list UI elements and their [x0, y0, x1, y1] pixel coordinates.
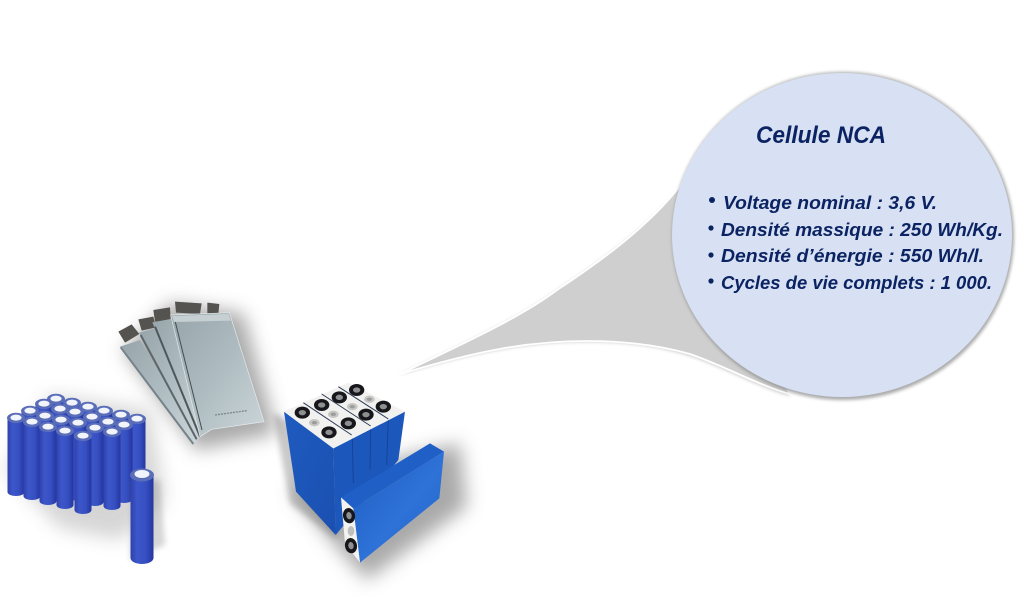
bullet list: specifications: Densité d’énergie : 550 Wh/l.	[721, 245, 984, 266]
prismatic cells	[273, 383, 467, 580]
bullet list: specifications: Voltage nominal : 3,6 V.	[723, 192, 937, 213]
callout circle	[672, 72, 1014, 400]
front cell	[341, 443, 444, 563]
pouch cells	[118, 302, 277, 450]
stack sides	[284, 412, 336, 535]
bullet list: specifications	[708, 192, 1003, 293]
single cell	[130, 468, 165, 564]
bullet list: specifications: Densité massique : 250 Wh/Kg.	[721, 219, 1003, 240]
callout tail	[399, 186, 790, 396]
tabs	[118, 302, 219, 343]
heading: Cellule NCA: Cellule NCA	[756, 122, 886, 149]
stack top	[284, 383, 405, 448]
cylindrical cells	[5, 394, 165, 564]
bullet list: specifications: Cycles de vie complets : 1 000.	[721, 272, 992, 293]
